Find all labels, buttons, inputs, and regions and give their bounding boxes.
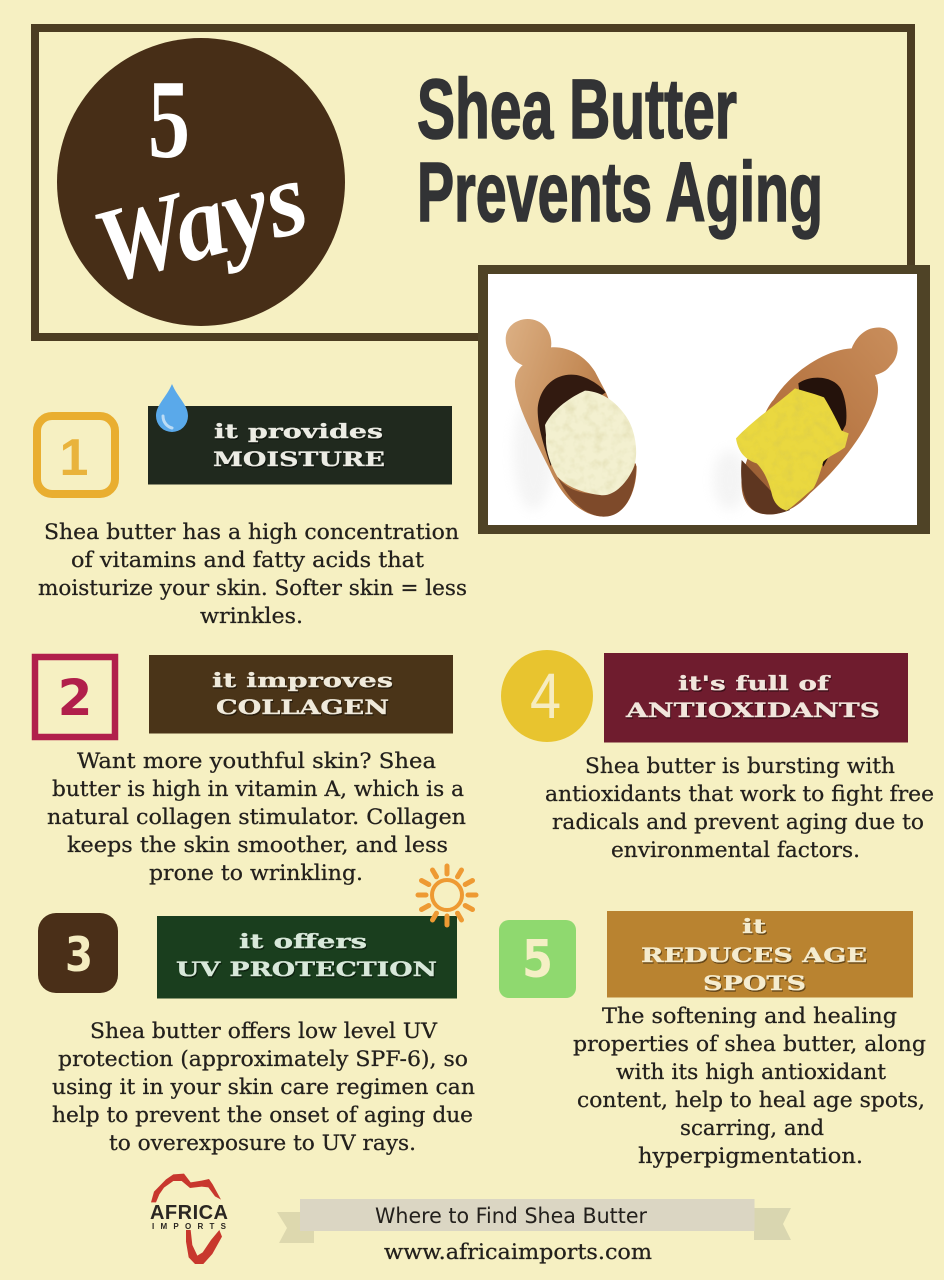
text block 2: natural collagen stimulator. Collagen xyxy=(47,805,466,829)
logo: Africa Imports xyxy=(150,1174,228,1264)
text block 2 xyxy=(47,749,466,885)
number badge 1 xyxy=(37,416,115,494)
number badge 2 xyxy=(35,657,115,737)
text block 1: Shea butter has a high concentration xyxy=(44,520,459,544)
text block 5 xyxy=(573,1004,926,1168)
text block 5: The softening and healing xyxy=(602,1004,897,1028)
text block 3: protection (approximately SPF-6), so xyxy=(58,1047,468,1071)
number badge 4 xyxy=(501,650,593,742)
text block 3: to overexposure to UV rays. xyxy=(109,1131,416,1155)
text block 3: help to prevent the onset of aging due xyxy=(52,1103,473,1127)
banner: it reduces age spots: it xyxy=(742,914,767,938)
banner: it improves collagen xyxy=(149,655,453,734)
number badge 2: 2 xyxy=(58,669,92,727)
left scoop with white shea butter xyxy=(506,319,637,517)
number badge 3 xyxy=(38,913,118,993)
banner: it offers UV protection: it offers xyxy=(239,929,367,953)
text block 2: Want more youthful skin? Shea xyxy=(77,749,436,773)
logo: Africa Imports: AFRICA xyxy=(150,1202,228,1224)
right scoop with yellow shea butter xyxy=(736,327,898,514)
banner: it improves collagen: COLLAGEN xyxy=(216,695,389,719)
text block 5: hyperpigmentation. xyxy=(638,1144,863,1168)
text block 5: content, help to heal age spots, xyxy=(577,1088,925,1112)
banner: it improves collagen: it improves xyxy=(212,668,393,692)
text block 1: of vitamins and fatty acids that xyxy=(71,548,425,572)
text block 4 xyxy=(545,754,934,862)
banner: it reduces age spots: REDUCES AGE xyxy=(641,943,867,967)
banner: it reduces age spots: SPOTS xyxy=(703,971,806,995)
banner: it's full of antioxidants xyxy=(604,653,908,742)
banner: it provides moisture: it provides xyxy=(214,419,383,443)
number 5: 5 xyxy=(148,58,190,182)
text block 4: antioxidants that work to fight free xyxy=(545,782,934,806)
scoop shadows xyxy=(513,397,747,510)
text block 1 xyxy=(38,520,467,628)
title xyxy=(417,62,823,239)
banner: it offers UV protection: UV PROTECTION xyxy=(176,957,437,981)
text block 3 xyxy=(52,1019,475,1155)
text block 1: moisturize your skin. Softer skin = less xyxy=(38,576,467,600)
section 5: age spots xyxy=(499,911,926,1168)
badge: 5 Ways circle xyxy=(57,38,345,326)
icon: water drop xyxy=(156,384,188,432)
website url: www.africaimports.com xyxy=(384,1240,652,1264)
text block 4: environmental factors. xyxy=(611,838,860,862)
text block 3: Shea butter offers low level UV xyxy=(90,1019,438,1043)
section 1: moisture xyxy=(37,384,467,628)
number badge 4: 4 xyxy=(530,660,561,732)
text block 3: using it in your skin care regimen can xyxy=(52,1075,475,1099)
text block 4: Shea butter is bursting with xyxy=(585,754,895,778)
banner: it provides moisture: MOISTURE xyxy=(213,447,385,471)
text block 2: butter is high in vitamin A, which is a xyxy=(52,777,464,801)
text block 5: properties of shea butter, along xyxy=(573,1032,926,1056)
word Ways: Ways xyxy=(82,138,319,306)
ribbon: where to find shea butter xyxy=(277,1199,791,1243)
ribbon: where to find shea butter: Where to Find Shea Butter xyxy=(375,1204,647,1228)
logo: Africa Imports: IMPORTS xyxy=(152,1222,227,1231)
number badge 3: 3 xyxy=(65,928,93,983)
header frame xyxy=(35,28,911,337)
banner: it's full of antioxidants: ANTIOXIDANTS xyxy=(625,698,880,722)
photo: shea butter in wooden scoops xyxy=(478,265,930,534)
section 2: collagen xyxy=(35,655,466,885)
number badge 1: 1 xyxy=(60,429,88,487)
text block 1: wrinkles. xyxy=(200,604,303,628)
text block 2: prone to wrinkling. xyxy=(149,861,363,885)
text block 5: with its high antioxidant xyxy=(616,1060,887,1084)
title: Shea Butter xyxy=(417,62,737,156)
number badge 5 xyxy=(499,920,576,998)
section 3: UV protection xyxy=(38,866,476,1155)
text block 2: keeps the skin smoother, and less xyxy=(67,833,448,857)
section 4: antioxidants xyxy=(501,650,934,862)
text block 4: radicals and prevent aging due to xyxy=(552,810,924,834)
icon: sun xyxy=(418,866,476,925)
banner: it provides moisture xyxy=(148,406,452,484)
number badge 5: 5 xyxy=(522,930,553,990)
text block 5: scarring, and xyxy=(680,1116,824,1140)
banner: it offers UV protection xyxy=(157,916,457,998)
banner: it's full of antioxidants: it's full of xyxy=(678,671,831,695)
banner: it reduces age spots xyxy=(607,911,913,998)
